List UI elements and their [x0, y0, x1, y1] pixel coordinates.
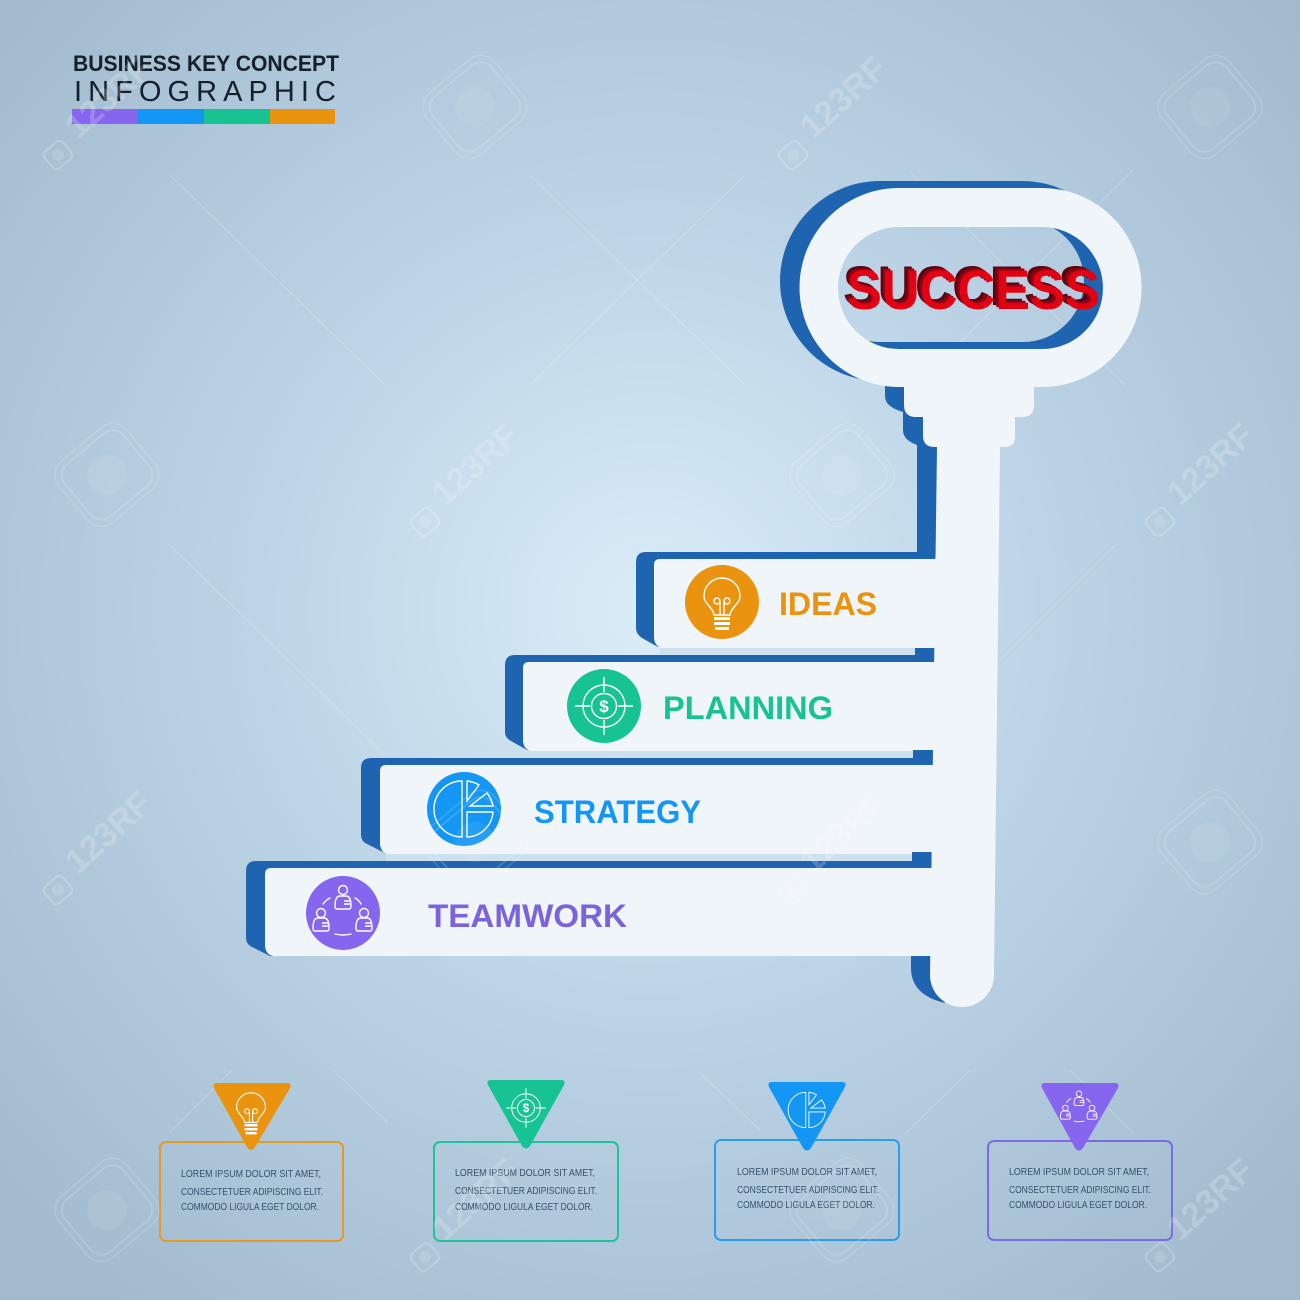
- panel: teamwork note: [988, 1083, 1172, 1240]
- success text: SUCCESS: [847, 258, 1100, 321]
- text: planning note: CONSECTETUER ADIPISCING ELIT.: [455, 1185, 597, 1197]
- panel: strategy note: [715, 1082, 899, 1240]
- key body: [799, 188, 1142, 1007]
- text: planning note: [455, 1167, 597, 1213]
- icon: target: [506, 1088, 546, 1128]
- label: ideas: IDEAS: [779, 586, 877, 622]
- label: planning: PLANNING: [663, 690, 833, 726]
- bar: strategy shadow: [361, 758, 933, 853]
- bar: planning: [523, 662, 960, 751]
- key shadow: [780, 181, 1122, 1003]
- bar: strategy: [380, 765, 960, 854]
- text: teamwork note: [1009, 1166, 1151, 1211]
- watermark: 123RF: [58, 49, 159, 146]
- icon: team: [1060, 1091, 1097, 1122]
- title: [72, 51, 340, 124]
- text: strategy note: [737, 1166, 879, 1211]
- heading: business key concept: BUSINESS KEY CONCEPT: [73, 51, 340, 76]
- watermark: 123RF: [1160, 1151, 1261, 1248]
- icon: bulb: [237, 1093, 265, 1134]
- colour bar: [72, 109, 335, 124]
- panel: ideas note: [160, 1083, 343, 1241]
- watermark: 123RF: [1160, 416, 1261, 513]
- label: teamwork: TEAMWORK: [428, 898, 627, 934]
- watermark: 123RF: [425, 1151, 526, 1248]
- bar: ideas shadow: [636, 552, 935, 647]
- watermark: 123RF: [793, 784, 894, 881]
- panel: planning note: [434, 1080, 618, 1241]
- text: ideas note: CONSECTETUER ADIPISCING ELIT.: [181, 1186, 323, 1198]
- bar: ideas: [654, 559, 960, 648]
- heading: infographic: INFOGRAPHIC: [74, 76, 336, 108]
- success text: SUCCESS: [843, 254, 1093, 317]
- text: teamwork note: CONSECTETUER ADIPISCING ELIT.: [1009, 1184, 1151, 1196]
- bar: teamwork: [265, 868, 960, 956]
- strategy step: [427, 772, 701, 846]
- text: strategy note: COMMODO LIGULA EGET DOLOR.: [737, 1199, 875, 1211]
- text: strategy note: LOREM IPSUM DOLOR SIT AMET,: [737, 1166, 877, 1178]
- key illustration: [246, 181, 1142, 1007]
- icon: pie chart: [788, 1092, 825, 1128]
- icon: team: [306, 876, 380, 950]
- bar: teamwork shadow: [246, 861, 932, 956]
- success text: SUCCESS: [845, 256, 1097, 319]
- text: strategy note: CONSECTETUER ADIPISCING ELIT.: [737, 1184, 879, 1196]
- icon: pie chart: [427, 772, 501, 846]
- planning step: [567, 669, 833, 743]
- watermark: 123RF: [58, 784, 159, 881]
- text: planning note: LOREM IPSUM DOLOR SIT AMET,: [455, 1167, 595, 1179]
- text: ideas note: [181, 1168, 323, 1213]
- bar: planning shadow: [505, 655, 934, 750]
- text: teamwork note: COMMODO LIGULA EGET DOLOR.: [1009, 1199, 1147, 1211]
- text: ideas note: LOREM IPSUM DOLOR SIT AMET,: [181, 1168, 321, 1180]
- text: planning note: COMMODO LIGULA EGET DOLOR.: [455, 1201, 593, 1213]
- text: ideas note: COMMODO LIGULA EGET DOLOR.: [181, 1201, 319, 1213]
- watermark: 123RF: [425, 416, 526, 513]
- watermark: 123RF: [793, 49, 894, 146]
- icon: light bulb: [685, 565, 759, 639]
- teamwork step: [306, 876, 627, 950]
- ideas step: [685, 565, 877, 639]
- label: strategy: STRATEGY: [534, 794, 701, 830]
- text: teamwork note: LOREM IPSUM DOLOR SIT AMET,: [1009, 1166, 1149, 1178]
- icon: target: [567, 669, 641, 743]
